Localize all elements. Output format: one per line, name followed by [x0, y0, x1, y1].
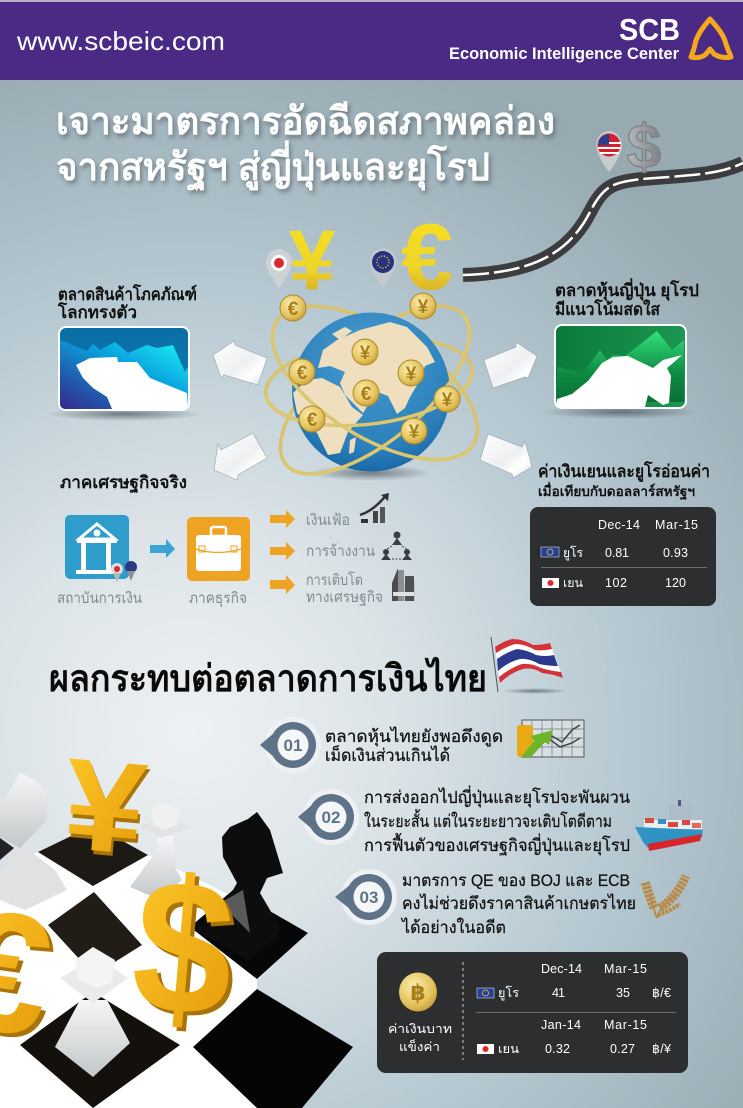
label: baht appreciates: แข็งค่า — [399, 1039, 440, 1054]
arrow: employment — [270, 542, 295, 560]
point 02 — [298, 785, 703, 856]
label: economic growth: การเติบโต — [306, 571, 363, 589]
coins: ¥ — [418, 297, 429, 318]
text — [400, 871, 636, 937]
black knight — [195, 812, 283, 960]
text: ในระยะสั้น แต่ในระยะยาวจะเติบโตดีตาม — [364, 809, 612, 831]
board — [0, 825, 353, 1108]
label: economic growth: ทางเศรษฐกิจ — [306, 589, 383, 606]
table: exchange rates against USD: Dec-14 — [598, 518, 640, 532]
icon: EU flag — [541, 547, 559, 557]
marker — [298, 789, 359, 845]
table: exchange rates against USD: 0.93 — [663, 546, 688, 560]
icon: Japan flag — [477, 1044, 494, 1054]
heading — [538, 461, 710, 501]
coins: ¥ — [442, 390, 453, 411]
road — [463, 163, 743, 275]
icon: container ship — [635, 800, 703, 851]
icon: people network — [381, 532, 412, 560]
heading: ตลาดหุ้นญี่ปุ่น ยุโรป — [555, 278, 699, 301]
panel: real economy — [57, 473, 415, 608]
label: business sector: ภาคธุรกิจ — [189, 590, 247, 608]
marker: 02 — [322, 808, 340, 827]
panel: yen and euro weaken — [530, 461, 716, 606]
panel: equity market — [542, 278, 699, 419]
icon: Japan flag — [542, 578, 559, 588]
icon: baht coin: ฿ — [410, 980, 426, 1005]
title: จากสหรัฐฯ สู่ญี่ปุ่นและยุโรป — [56, 140, 490, 192]
black squares — [0, 825, 353, 1108]
table: baht appreciates — [377, 952, 688, 1073]
coins: € — [288, 299, 299, 320]
globe — [292, 312, 450, 472]
icon: bank — [65, 515, 137, 582]
white pawn front — [55, 947, 130, 1077]
icon: city buildings — [392, 568, 415, 601]
label: baht appreciates: ค่าเงินบาท — [388, 1022, 452, 1036]
table: exchange rates against USD: เยน — [563, 576, 583, 590]
table: baht appreciates: 0.32 — [545, 1042, 570, 1056]
table: exchange rates against USD — [530, 507, 716, 606]
icon: rising coin stacks — [360, 493, 389, 523]
arrow: to equities — [484, 342, 537, 388]
arrow: to currencies — [480, 434, 532, 478]
text: การฟื้นตัวของเศรษฐกิจญี่ปุ่นและยุโรป — [364, 833, 630, 856]
marker — [260, 717, 321, 773]
heading: มีแนวโน้มสดใส — [555, 299, 661, 319]
centre name: Economic Intelligence Center — [449, 44, 679, 63]
marker: 01 — [284, 736, 302, 755]
text: คงไม่ช่วยดึงราคาสินค้าเกษตรไทย — [402, 893, 636, 913]
heading — [555, 278, 699, 319]
heading: เมื่อเทียบกับดอลลาร์สหรัฐฯ — [538, 481, 695, 501]
table: exchange rates against USD: ยูโร — [563, 545, 583, 561]
marker: 03 — [360, 888, 378, 907]
label: baht appreciates — [388, 1022, 452, 1054]
heading: impact on Thai financial markets: ผลกระทบต่อตลาดการเงินไทย — [49, 656, 487, 699]
white pawn — [130, 802, 190, 900]
coins: ¥ — [406, 364, 417, 385]
coins: ¥ — [360, 343, 371, 364]
table: baht appreciates: ฿/€ — [652, 986, 671, 1000]
point 03 — [335, 869, 686, 937]
table: baht appreciates: 35 — [616, 986, 630, 1000]
white knight — [0, 773, 67, 910]
table: baht appreciates: Dec-14 — [541, 962, 582, 976]
arrow: bank to business — [150, 539, 175, 558]
table: baht appreciates: 41 — [552, 986, 565, 1000]
label: financial institutions: สถาบันการเงิน — [57, 590, 142, 607]
icon: EU flag — [477, 988, 494, 998]
coins: € — [307, 410, 318, 431]
icon: stock chart — [517, 720, 584, 757]
card: bear — [58, 326, 190, 411]
panel: commodity market — [46, 284, 202, 421]
icon: US pin and dollar: $ — [627, 113, 661, 182]
table: baht appreciates: เยน — [498, 1042, 519, 1056]
orbits in front of the globe — [248, 315, 496, 503]
text — [325, 726, 503, 765]
label: economic growth — [306, 571, 383, 606]
table: baht appreciates: ฿/¥ — [652, 1042, 671, 1056]
globe with orbiting coins — [248, 276, 502, 503]
gold yen: ¥ — [58, 731, 152, 883]
icon: US pin and dollar — [596, 113, 661, 182]
point 01 — [260, 717, 584, 773]
card: bull — [554, 324, 687, 409]
label: inflation: เงินเฟ้อ — [306, 512, 350, 529]
heading: ค่าเงินเยนและยูโรอ่อนค่า — [538, 461, 710, 483]
heading: ภาคเศรษฐกิจจริง — [60, 473, 187, 494]
continents — [293, 322, 435, 455]
icon: Thai flag — [491, 637, 568, 694]
title — [56, 101, 555, 192]
header band — [0, 0, 743, 80]
coins: ¥ — [409, 422, 420, 443]
label: employment: การจ้างงาน — [306, 543, 375, 560]
arrow: to commodities — [213, 341, 267, 385]
arrow: inflation — [270, 510, 295, 528]
chess board illustration — [0, 731, 353, 1108]
icon: euro symbol with EU pin: € — [401, 204, 453, 309]
text: ได้อย่างในอดีต — [400, 917, 506, 937]
arrow: growth — [270, 575, 295, 594]
coins: € — [297, 363, 308, 384]
SCB wordmark: SCB — [619, 12, 680, 47]
coins: € — [361, 384, 372, 405]
icon: business briefcase — [187, 517, 250, 581]
icon: euro symbol with EU pin — [370, 204, 453, 309]
icon: yen symbol with Japan pin — [266, 213, 336, 307]
table: exchange rates against USD: Mar-15 — [655, 518, 698, 532]
gold yen: ¥ — [60, 735, 154, 887]
icon: SCB logo — [691, 19, 731, 58]
table: exchange rates against USD: 120 — [665, 576, 686, 590]
icon: baht coin — [399, 972, 437, 1012]
heading — [57, 284, 197, 322]
arrow: to real economy — [214, 433, 267, 480]
text: มาตรการ QE ของ BOJ และ ECB — [402, 871, 630, 890]
text: เม็ดเงินส่วนเกินได้ — [325, 744, 450, 765]
gold dollar: $ — [125, 838, 242, 1058]
heading: โลกทรงตัว — [57, 302, 137, 322]
title: เจาะมาตรการอัดฉีดสภาพคล่อง — [56, 101, 555, 143]
icon: wheat — [645, 876, 686, 918]
icon: yen symbol with Japan pin: ¥ — [289, 213, 336, 307]
heading: ตลาดสินค้าโภคภัณฑ์ — [58, 284, 197, 304]
table: baht appreciates: 0.27 — [610, 1042, 635, 1056]
table: baht appreciates: Mar-15 — [604, 1018, 647, 1032]
orbits behind the globe — [248, 276, 502, 503]
text: ตลาดหุ้นไทยยังพอดึงดูด — [325, 726, 503, 747]
text: การส่งออกไปญี่ปุ่นและยุโรปจะพันผวน — [364, 785, 630, 808]
table: exchange rates against USD: 102 — [605, 576, 627, 590]
gold dollar: $ — [129, 842, 246, 1062]
table: exchange rates against USD: 0.81 — [605, 546, 629, 560]
table: baht appreciates: Mar-15 — [604, 962, 647, 976]
coins — [280, 293, 460, 444]
table: baht appreciates: ยูโร — [498, 985, 519, 1001]
marker — [335, 869, 397, 925]
text — [364, 785, 630, 856]
table: baht appreciates: Jan-14 — [541, 1018, 581, 1032]
website url: www.scbeic.com — [16, 26, 225, 56]
